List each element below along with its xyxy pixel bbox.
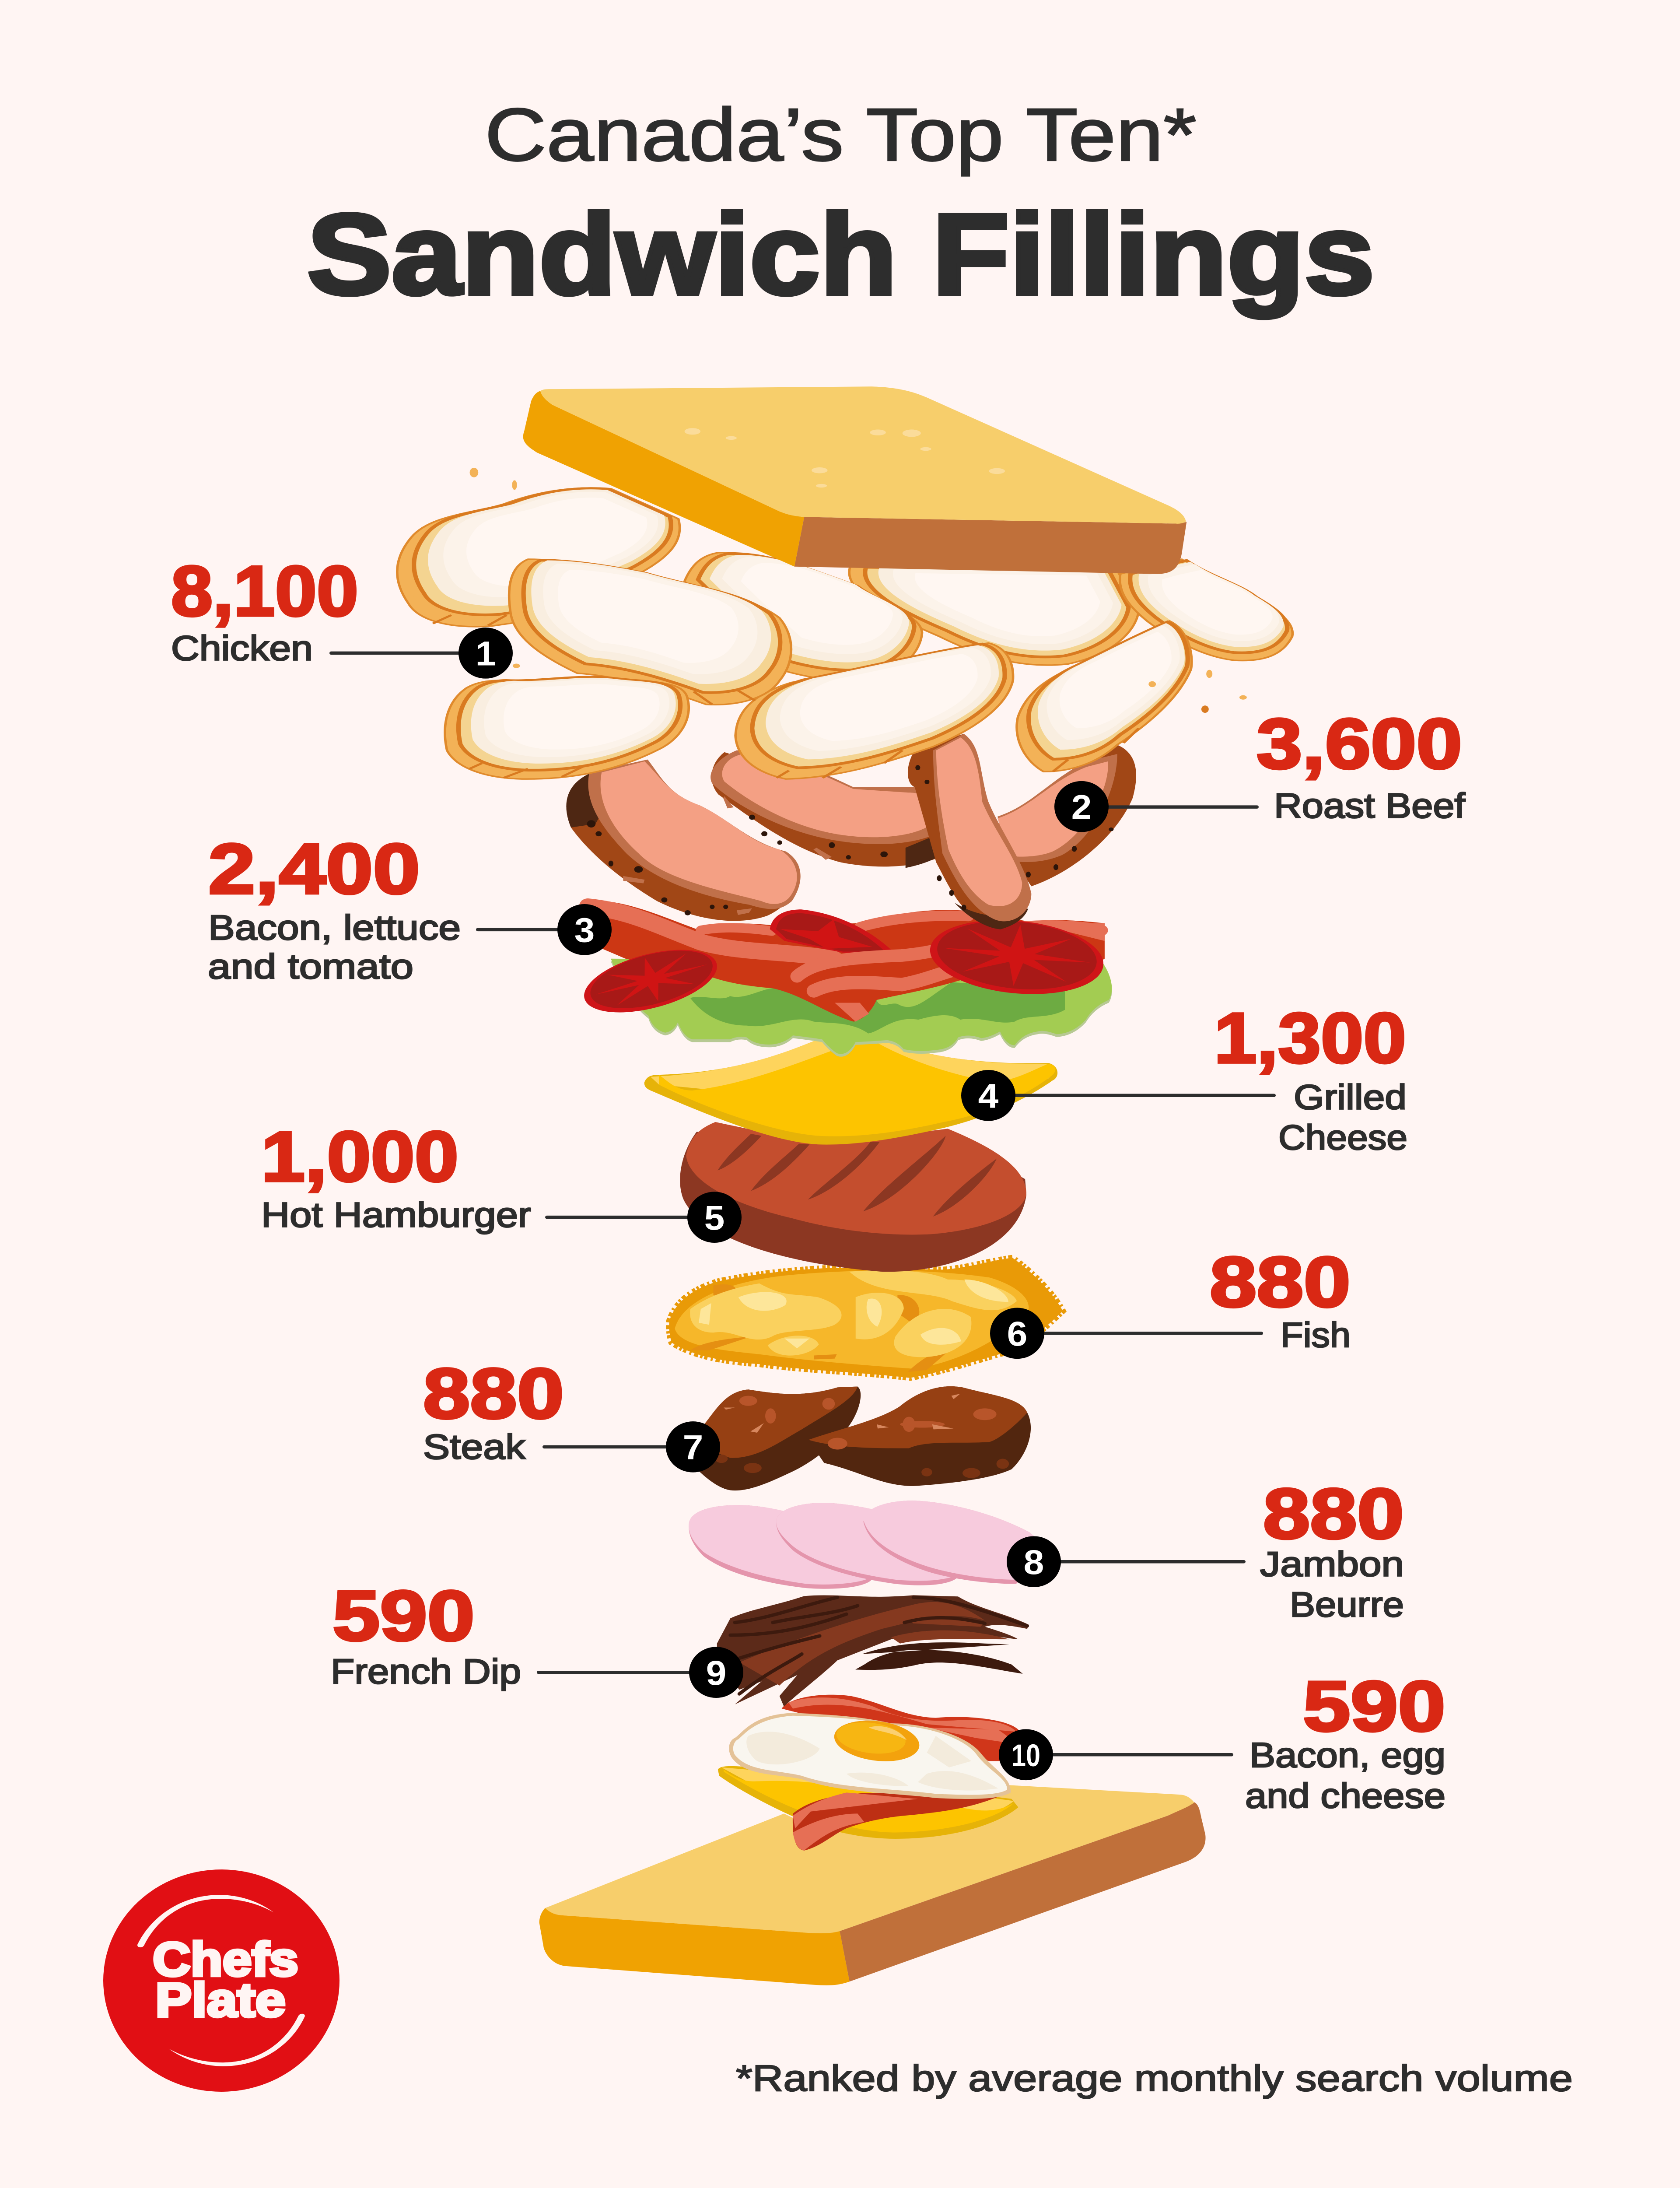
leader line	[1046, 1753, 1232, 1757]
logo disc	[103, 1869, 340, 2092]
tomato slice, right	[926, 912, 1107, 1002]
logo wordmark: Chefs	[153, 1932, 298, 1986]
tomato slice, left	[577, 938, 724, 1024]
value: 880	[1210, 1242, 1351, 1322]
tomato slice, middle	[770, 909, 894, 953]
label	[208, 908, 461, 986]
number badge: 5	[704, 1199, 724, 1237]
label: French Dip	[331, 1652, 521, 1691]
number badge: 6	[1007, 1315, 1027, 1353]
beef slice, centre	[710, 750, 956, 868]
number badge	[990, 1308, 1044, 1359]
leader line	[1006, 1094, 1274, 1097]
label: Bacon, lettuce	[208, 908, 461, 947]
bacon strips	[581, 900, 1105, 1022]
value: 590	[332, 1576, 475, 1655]
beef slice, vertical front	[908, 734, 1031, 929]
chicken crumbs	[470, 468, 1247, 713]
number badge: 3	[574, 911, 595, 950]
filling 3: bacon, lettuce and tomato	[577, 900, 1112, 1057]
chicken piece, back centre	[685, 553, 922, 680]
label: Roast Beef	[1274, 786, 1466, 825]
title line 1: Canada’s Top Ten*	[485, 93, 1197, 177]
leader line	[1052, 1560, 1244, 1564]
number badge: 7	[683, 1428, 703, 1467]
chicken piece, lower left	[445, 677, 689, 779]
chicken piece, far right	[1120, 559, 1292, 661]
number badge	[687, 1192, 742, 1243]
label: and cheese	[1245, 1776, 1446, 1816]
callout 7: steak	[423, 1353, 720, 1473]
callout 3: bacon, lettuce and tomato	[208, 829, 612, 986]
leader line	[478, 928, 564, 931]
filling 9: French dip beef shreds	[717, 1595, 1029, 1707]
logo wordmark	[153, 1932, 298, 2027]
value: 880	[423, 1353, 564, 1433]
callout 9: french dip	[331, 1576, 743, 1698]
callout 10: bacon, egg and cheese	[999, 1666, 1446, 1816]
filling 1: chicken pieces behind the bread	[397, 386, 1292, 779]
filling 8: Jambon Beurre ham slices	[689, 1501, 1052, 1589]
number badge: 10	[1012, 1738, 1040, 1773]
value: 1,300	[1214, 998, 1406, 1078]
sandwich illustration	[397, 386, 1292, 1985]
leader line	[547, 1216, 696, 1219]
bacon strip, front	[588, 907, 960, 1022]
beef slice, right	[998, 745, 1136, 886]
callout 8: jambon beurre	[1007, 1474, 1404, 1624]
number badge	[458, 628, 513, 679]
filling 2: roast beef slices	[566, 734, 1136, 929]
number badge	[961, 1070, 1015, 1121]
label: and tomato	[208, 947, 413, 986]
label: Bacon, egg	[1250, 1736, 1446, 1774]
logo: Chefs Plate	[103, 1869, 340, 2092]
leader line	[544, 1445, 674, 1448]
leader line	[1037, 1332, 1261, 1335]
number badge: 9	[706, 1654, 726, 1692]
logo swooshes	[137, 1895, 305, 2066]
number badge: 4	[978, 1077, 998, 1115]
bottom bread slice	[539, 1785, 1206, 1985]
chicken piece, top left	[397, 488, 680, 627]
number badge: 8	[1024, 1543, 1044, 1581]
number badge	[1007, 1536, 1061, 1587]
value: 8,100	[171, 551, 358, 631]
chicken piece, lower centre	[735, 643, 1013, 779]
label: Chicken	[171, 629, 313, 668]
label: Jambon	[1260, 1545, 1404, 1584]
label	[1260, 1545, 1404, 1624]
number badge: 2	[1071, 788, 1092, 827]
lettuce	[611, 959, 1112, 1057]
filling 10: bacon, egg and cheese	[718, 1695, 1018, 1851]
chicken piece, lower right	[1017, 621, 1192, 771]
filling 4: grilled cheese slice	[644, 1039, 1057, 1145]
callout 2: roast beef	[1054, 704, 1466, 832]
filling 7: steak	[695, 1386, 1031, 1490]
callout 1: chicken	[171, 551, 513, 679]
value: 880	[1263, 1474, 1404, 1553]
beef slice, left	[566, 760, 801, 921]
value: 1,000	[261, 1117, 458, 1196]
value: 3,600	[1256, 704, 1462, 784]
footnote: *Ranked by average monthly search volume	[736, 2058, 1573, 2099]
logo wordmark: Plate	[155, 1973, 286, 2027]
label	[1245, 1736, 1446, 1816]
leader line	[331, 651, 464, 655]
chicken crust cracks	[433, 615, 1139, 778]
top bread slice	[523, 386, 1186, 574]
callout 5: hot hamburger	[261, 1117, 742, 1243]
label: Beurre	[1290, 1585, 1404, 1624]
filling 6: fish	[669, 1258, 1063, 1378]
value: 590	[1303, 1666, 1446, 1746]
chicken piece, centre left	[509, 559, 791, 705]
callout 4: grilled cheese	[961, 998, 1407, 1157]
label: Steak	[423, 1427, 526, 1466]
label: Grilled	[1294, 1078, 1407, 1117]
title line 2: Sandwich Fillings	[307, 191, 1375, 319]
leader line	[1102, 805, 1257, 809]
title	[307, 93, 1375, 319]
label: Fish	[1281, 1315, 1351, 1354]
number badge	[557, 904, 612, 955]
leader line	[539, 1671, 696, 1674]
label	[1278, 1078, 1407, 1157]
filling 5: hot hamburger patty	[680, 1122, 1026, 1272]
number badge: 1	[476, 635, 496, 673]
number badge	[1054, 781, 1109, 832]
value: 2,400	[208, 829, 420, 908]
chicken piece, back right	[849, 567, 1139, 665]
callout 6: fish	[990, 1242, 1351, 1359]
label: Cheese	[1278, 1118, 1407, 1157]
number badge	[689, 1647, 743, 1698]
number badge	[999, 1729, 1053, 1780]
number badge	[666, 1421, 720, 1473]
label: Hot Hamburger	[261, 1196, 531, 1234]
